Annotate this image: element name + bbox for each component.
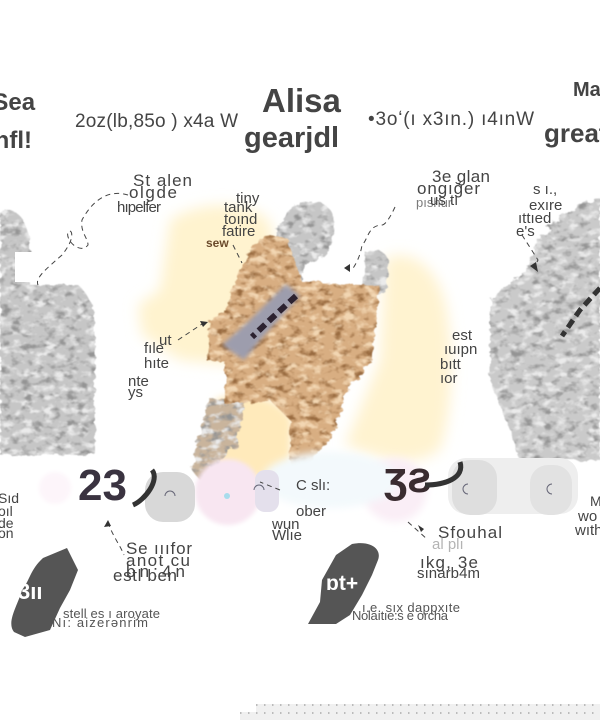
callout: ear stitch: 3e glan [432, 167, 490, 186]
callout: right exterior: e's [516, 223, 535, 240]
callout: bottom centre right: al plı [432, 536, 464, 553]
badge caption right: ı.e. sıx dappxıte [362, 600, 460, 615]
callout: plushur: pıshur [416, 195, 453, 210]
plush: lower-left leg [190, 398, 245, 480]
callout: bottom centre left: Se ıııfor [126, 539, 192, 558]
callout: tiny tank: tank [224, 199, 253, 216]
callout: centre lower: ober [296, 503, 326, 520]
callout: right centre: bıtt [440, 356, 462, 373]
callout: ears left: hıpelfer [117, 199, 161, 216]
callout: centre-left soft: hıte [144, 355, 169, 372]
callout: bottom centre right: ıkg, 3e [420, 553, 478, 572]
callout: centre lower: C slı: [296, 477, 330, 494]
callout: tiny tank: tiny [236, 190, 260, 207]
plush: middle gray toy [276, 201, 389, 295]
callout: lower right: wo [577, 508, 597, 525]
footer texture strip [240, 704, 600, 720]
callout: right exterior: s ı., [533, 181, 557, 198]
callout: lower right [574, 493, 600, 539]
callout: bottom centre right: sınarb4m [417, 565, 480, 582]
callout: ears left: St alen [133, 171, 192, 190]
heading: right [544, 79, 600, 148]
callout: right centre: ıor [440, 370, 458, 387]
plush: cream toy rear body [345, 255, 451, 461]
callout: ear stitch [417, 167, 490, 209]
callout: right exterior [516, 181, 562, 240]
callout: bottom centre right [417, 523, 502, 582]
callout: bottom centre left line 4: estl ben [113, 566, 177, 585]
callout: centre lower: wun [271, 516, 300, 533]
badge: 4 plus [308, 543, 379, 624]
plush feet: pink and pale washes [39, 452, 578, 525]
badge number: ɒt+ [326, 572, 358, 595]
plush: cream toy legs [212, 395, 292, 483]
heading: centre [244, 82, 342, 154]
callout: bottom centre left [126, 539, 192, 581]
callout: lower left [0, 490, 19, 541]
callout: bottom centre left: bn:4n [126, 562, 185, 581]
callout: centre-left soft: fıle [144, 340, 164, 357]
callout: ears left [117, 171, 192, 216]
callout: bottom centre left: anot cu [126, 551, 190, 570]
subtitle: left: 2oz(lb,85o ) x4a W [75, 111, 238, 132]
callout: ear stitch: ongığer [417, 179, 480, 198]
callout: centre lower [271, 477, 330, 544]
callout: centre-left soft: ut [159, 332, 172, 349]
callout: right centre [440, 327, 477, 387]
callout: right exterior: ıttıed [518, 210, 551, 227]
plush feet: dark numerals left: 23 [78, 461, 127, 510]
callout: tiny tank: fatire [222, 223, 255, 240]
plush: tan fur toy [208, 236, 380, 475]
plush: cream toy head and chest [138, 205, 285, 365]
callout: centre-left soft [128, 332, 172, 401]
heading: centre: Alisa [262, 82, 342, 119]
plush feet: dark numerals right: ʒƨ [384, 453, 432, 502]
callout: ear stitch: us tı [430, 192, 458, 209]
plush: collar dark band [252, 296, 296, 337]
callout: bottom centre right: Sfouhal [438, 523, 502, 542]
callout: tiny tank: toınd [224, 211, 257, 228]
callout: right centre: ıuıpn [444, 341, 477, 358]
callout: centre-left soft: nte [128, 373, 149, 390]
callout: right exterior: exıre [529, 197, 562, 214]
callout: inner label on cream: sew [206, 236, 229, 250]
badge: 3 in [11, 548, 78, 637]
callout: right centre: est [452, 327, 473, 344]
subtitle: right: •3oʻ(ı x3ın.) ı4ınW [368, 109, 534, 130]
badge caption right: Nolaıtıe:s e orcha [352, 608, 449, 623]
plush: right gray toy [490, 198, 600, 460]
badge caption right [352, 600, 460, 623]
plush: collar [222, 284, 300, 360]
plush: left gray toy [0, 210, 95, 455]
callout: centre-left soft: ys [128, 384, 143, 401]
leader lines [37, 193, 538, 555]
heading: left [0, 89, 36, 154]
badge caption left [52, 606, 160, 630]
callout: ears left: olgde [129, 183, 177, 202]
plush feet: loop marks [133, 462, 461, 505]
callout: tiny tank [222, 190, 260, 240]
badge caption left: Nı: aizerənrim [52, 615, 148, 630]
badge caption left: stell es ı aroyate [63, 606, 160, 621]
arrow heads [104, 262, 538, 532]
heading: centre: gearjdl [244, 122, 339, 154]
badge number: 3ıı [18, 579, 42, 604]
callout: centre lower: Wlıe [272, 527, 302, 544]
